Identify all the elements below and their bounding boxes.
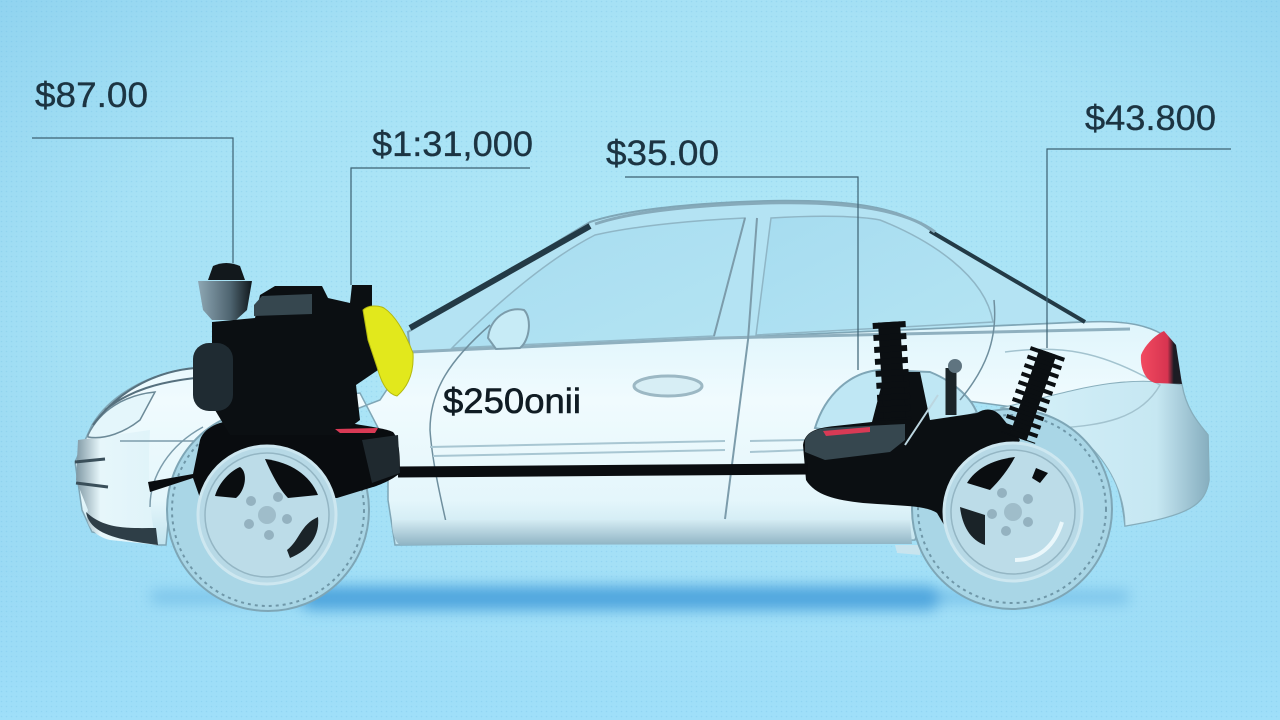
rear spokes gap small [1032,468,1048,483]
rear spokes gap top [967,457,1015,490]
leader line: engine [32,138,233,263]
front wheel arch line [150,427,203,507]
strut [946,368,956,415]
bumper lower dark [86,512,158,545]
canister cap [208,263,245,280]
front bumper details [75,459,108,487]
rear trunk crease [1005,349,1160,428]
right coil spring [1018,352,1048,438]
headlight [88,392,155,438]
windshield seal [410,226,590,328]
yellow reservoir [363,306,413,396]
ground shadow [150,586,1130,610]
belt line [410,329,1130,352]
door pillar [714,218,757,519]
roof line [595,203,935,232]
rear window seal [930,231,1085,322]
main lower body shell [75,322,1209,545]
strut brace [905,395,938,445]
door trim lines [430,440,805,456]
car body [75,201,1209,555]
front wheel rim [198,446,336,584]
side mirror [488,309,529,349]
air filter canister [198,281,252,320]
rear wheel rim [944,443,1082,581]
dark tub [803,372,1020,530]
left coil spring [889,322,895,420]
rear wheel well arch [815,370,977,440]
rear hub [1004,503,1022,521]
front door handle [634,376,702,396]
price label: front component: $1:31,000 [372,125,533,164]
lower grey vent [362,435,400,483]
rear window [756,216,993,335]
front door outline [430,325,724,522]
red trim [335,428,378,433]
red trim [823,427,870,436]
rear spokes gap left [960,507,985,545]
rear arc slot [1015,522,1062,560]
hood stripes [93,368,195,425]
leader line: right spring [1047,149,1231,348]
side sill [392,520,912,545]
sill extension [895,545,920,555]
front spokes gap top [265,459,318,498]
black drive shaft [398,469,808,472]
price label: engine: $87.00 [35,76,148,115]
leader line: front component [351,168,530,285]
price label: door: $250onii [443,382,581,421]
front spokes gap right [287,517,318,558]
strut top [948,359,962,373]
rear wheel tyre [912,409,1112,609]
price label: left spring: $35.00 [606,134,719,173]
upper grey band [805,424,905,460]
engine [148,263,413,498]
leader line: left spring [625,177,858,370]
engine main block [212,285,378,435]
front wheel tyre [167,409,369,611]
front spokes gap left [215,467,245,498]
rear quarter panel [1000,381,1209,526]
pulley housing [193,343,233,411]
rear door outline [960,300,995,400]
front window [452,218,745,348]
front bumper [76,430,157,545]
rear suspension and subframe [803,322,1048,530]
price label: right spring: $43.800 [1085,99,1216,138]
headlight crease [120,440,200,442]
engine lower block [148,420,400,498]
hub [258,506,276,524]
tail light [1141,331,1182,384]
roof and cabin shell [408,201,1085,352]
valve cover [254,294,312,316]
